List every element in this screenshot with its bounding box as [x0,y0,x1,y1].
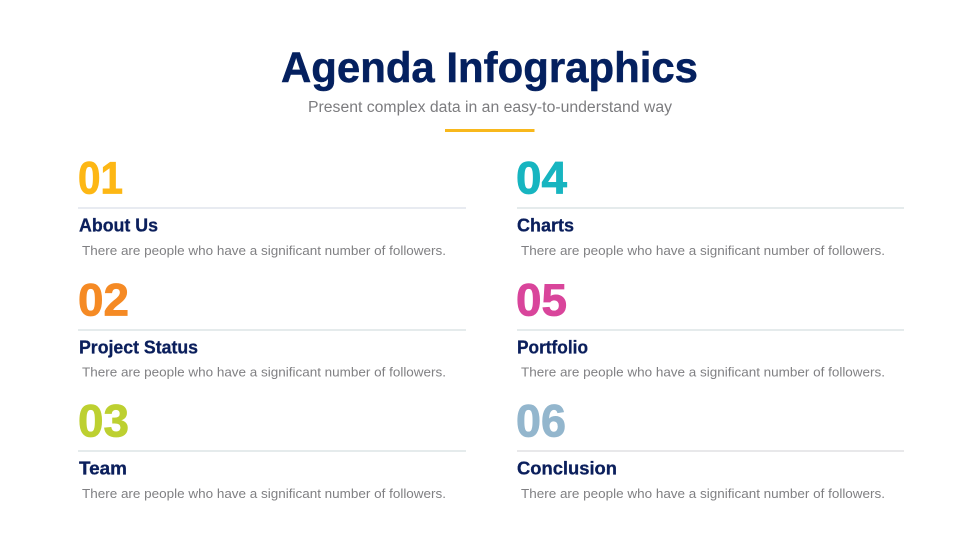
description: There are people who have a significant number of followers. [82,364,446,380]
number 03: 03 [78,396,129,446]
heading: Portfolio: Portfolio [517,338,588,358]
heading: Team: Team [79,458,127,478]
heading: About Us: About Us [79,216,158,236]
heading: Project Status: Project Status [79,338,198,358]
agenda item 04: Charts [516,152,904,258]
heading: Conclusion: Conclusion [517,458,617,478]
agenda item 01: About Us [78,152,466,258]
agenda item 06: Conclusion [516,396,904,501]
description: There are people who have a significant number of followers. [521,364,885,380]
description: There are people who have a significant number of followers. [82,486,446,501]
subtitle: Present complex data in an easy-to-understand way [308,99,672,116]
agenda item 05: Portfolio [516,274,904,380]
title: Agenda Infographics [281,45,698,92]
number 06: 06 [516,396,566,446]
agenda item 02: Project Status [78,274,466,380]
description: There are people who have a significant number of followers. [521,243,885,258]
number 05: 05 [516,274,567,326]
agenda item 03: Team [78,396,466,501]
number 01: 01 [78,152,123,204]
description: There are people who have a significant number of followers. [521,486,885,501]
heading: Charts: Charts [517,216,574,236]
description: There are people who have a significant number of followers. [82,243,446,258]
title accent bar [445,129,534,132]
number 04: 04 [516,152,567,204]
number 02: 02 [78,274,129,326]
